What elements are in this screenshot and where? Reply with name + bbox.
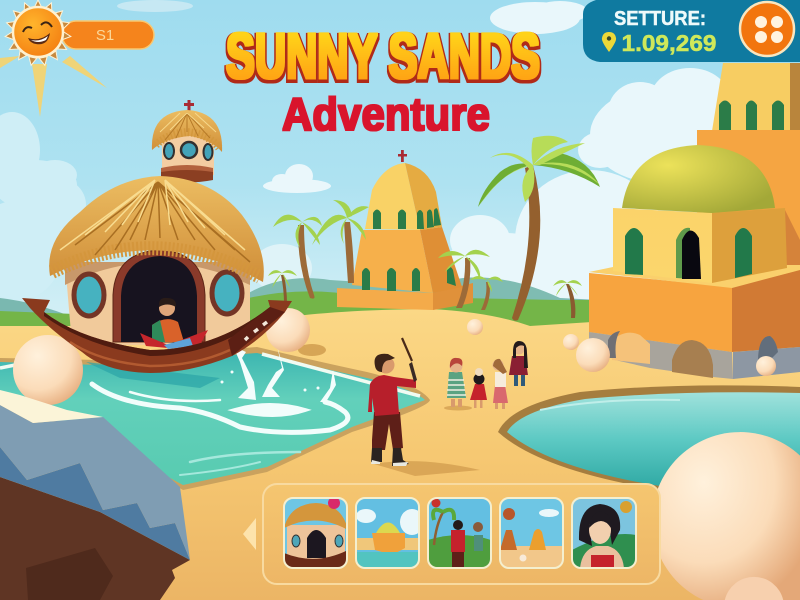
palm tree: large xyxy=(478,136,600,321)
hut windows xyxy=(74,274,104,316)
thumbnail 5: girl portrait xyxy=(572,498,636,568)
sun face xyxy=(13,7,63,57)
water splash xyxy=(220,346,336,402)
sand spheres background xyxy=(13,308,776,405)
score label: SETTURE: xyxy=(614,8,706,30)
hut tower xyxy=(152,100,222,182)
score panel xyxy=(583,0,800,62)
hut roof thatch xyxy=(49,176,264,282)
middle tier xyxy=(697,130,800,275)
group of children xyxy=(444,341,528,410)
right sand temple xyxy=(589,63,800,379)
dome block xyxy=(613,208,712,283)
lower tier xyxy=(589,273,732,352)
clouds xyxy=(0,0,730,310)
left arrow xyxy=(243,518,256,550)
sand ground xyxy=(0,309,800,600)
sun spikes xyxy=(5,0,71,66)
score value: 1.09,269 xyxy=(622,30,716,56)
stone base and arches xyxy=(589,331,800,379)
icon: map pin xyxy=(602,32,616,52)
title xyxy=(226,20,540,140)
sky background xyxy=(0,0,800,335)
sun level badge xyxy=(0,0,154,117)
left water pool xyxy=(0,347,430,490)
middle sand temple xyxy=(337,150,473,310)
palm trees: mid-ground xyxy=(268,200,582,318)
title line: Adventure: Adventure xyxy=(282,88,490,140)
thatched hut xyxy=(22,100,292,373)
foreground rock xyxy=(0,390,190,600)
foreground spheres xyxy=(652,432,800,600)
thumbnail 4: sand castles xyxy=(500,498,563,568)
title line: Sunny Sands: SUNNY SANDS xyxy=(226,20,540,92)
thumbnail panel xyxy=(243,484,660,584)
menu button xyxy=(740,2,794,56)
person reading in boat xyxy=(140,298,208,349)
green dome xyxy=(622,145,775,213)
thumbnail 2: temple xyxy=(357,499,418,567)
thumbnail 3: boy and friend xyxy=(428,498,491,568)
upper tower xyxy=(712,63,790,131)
level pill: S1 xyxy=(96,27,114,44)
water foam swirl xyxy=(92,384,348,475)
wooden boat xyxy=(22,298,292,373)
boy with stick xyxy=(368,338,480,476)
distant hills xyxy=(0,277,600,330)
right water pool xyxy=(498,385,800,492)
level pill xyxy=(62,21,154,49)
thumbnail 1: hut xyxy=(284,497,348,568)
hut body xyxy=(65,262,250,345)
sun rays xyxy=(0,56,107,117)
hut door xyxy=(113,250,205,342)
